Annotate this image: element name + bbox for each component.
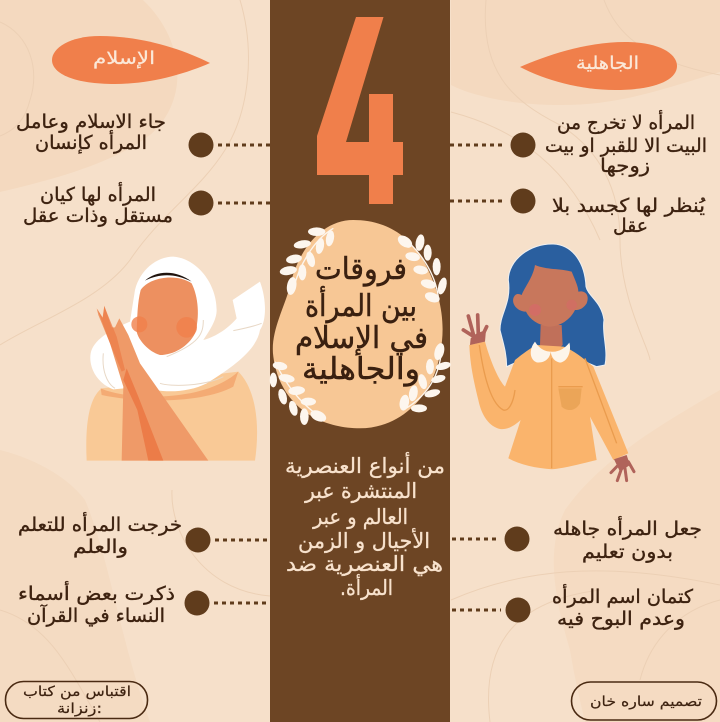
center paragraph: هي العنصرية ضد: [286, 552, 443, 576]
left column text: مستقل وذات عقل: [23, 205, 173, 227]
left column text: [16, 111, 182, 627]
left column text: جاء الاسلام وعامل: [16, 111, 166, 133]
center title: بين المرأة: [305, 285, 417, 324]
illustration: woman in white hijab: [86, 257, 265, 461]
left column text: ذكرت بعض أسماء: [18, 581, 175, 605]
right column text: زوجها: [600, 155, 650, 177]
right column text: المرأه لا تخرج من: [557, 110, 695, 134]
left column text: والعلم: [73, 536, 128, 558]
pill: quote source: :زنزانة: [57, 701, 102, 717]
pill: quote source: اقتباس من كتاب: [23, 684, 131, 700]
right column text: البيت الا للقبر او بيت: [545, 135, 707, 157]
heading: Jahiliyyah: [520, 42, 677, 90]
center paragraph: العالم و عبر: [312, 505, 408, 530]
left column text: المرأه لها كيان: [40, 182, 156, 206]
illustration: woman with blue hair: [463, 244, 634, 481]
center title: والجاهلية: [302, 352, 420, 387]
left column text: خرجت المرأه للتعلم: [18, 512, 182, 536]
heading: Islam: الإسلام: [93, 48, 155, 69]
right column text: [545, 110, 707, 630]
center paragraph: المنتشرة عبر: [304, 479, 417, 503]
pill: designer credit: تصميم ساره خان: [590, 694, 702, 710]
pill: quote source: [6, 682, 148, 718]
left column text: النساء في القرآن: [27, 603, 165, 627]
egg shaped title panel: [270, 220, 452, 428]
center paragraph: من أنواع العنصرية: [285, 452, 445, 478]
connectors: right: [450, 132, 536, 622]
right column text: جعل المرأه جاهله: [553, 516, 702, 540]
center paragraph: [285, 452, 445, 600]
heading: Islam: [52, 36, 210, 84]
center brown band: [270, 0, 450, 722]
connectors: left: [184, 132, 270, 616]
center paragraph: الأجيال و الزمن: [298, 528, 430, 553]
center title: في الإسلام: [295, 321, 428, 356]
right column text: بدون تعليم: [582, 541, 673, 563]
right column text: كتمان اسم المرأه: [552, 584, 694, 608]
right column text: يُنظر لها كجسد بلا: [552, 195, 706, 217]
left column text: المرأه كإنسان: [35, 130, 147, 155]
right column text: عقل: [613, 215, 648, 237]
wreath leaves: [270, 227, 452, 425]
number 4: [317, 17, 403, 204]
center title: [295, 252, 428, 387]
center title: فروقات: [315, 252, 407, 287]
pill: designer credit: [572, 682, 716, 720]
heading: Jahiliyyah: الجاهلية: [576, 53, 639, 74]
center paragraph: المرأة.: [340, 574, 393, 600]
right column text: وعدم البوح فيه: [557, 608, 685, 630]
